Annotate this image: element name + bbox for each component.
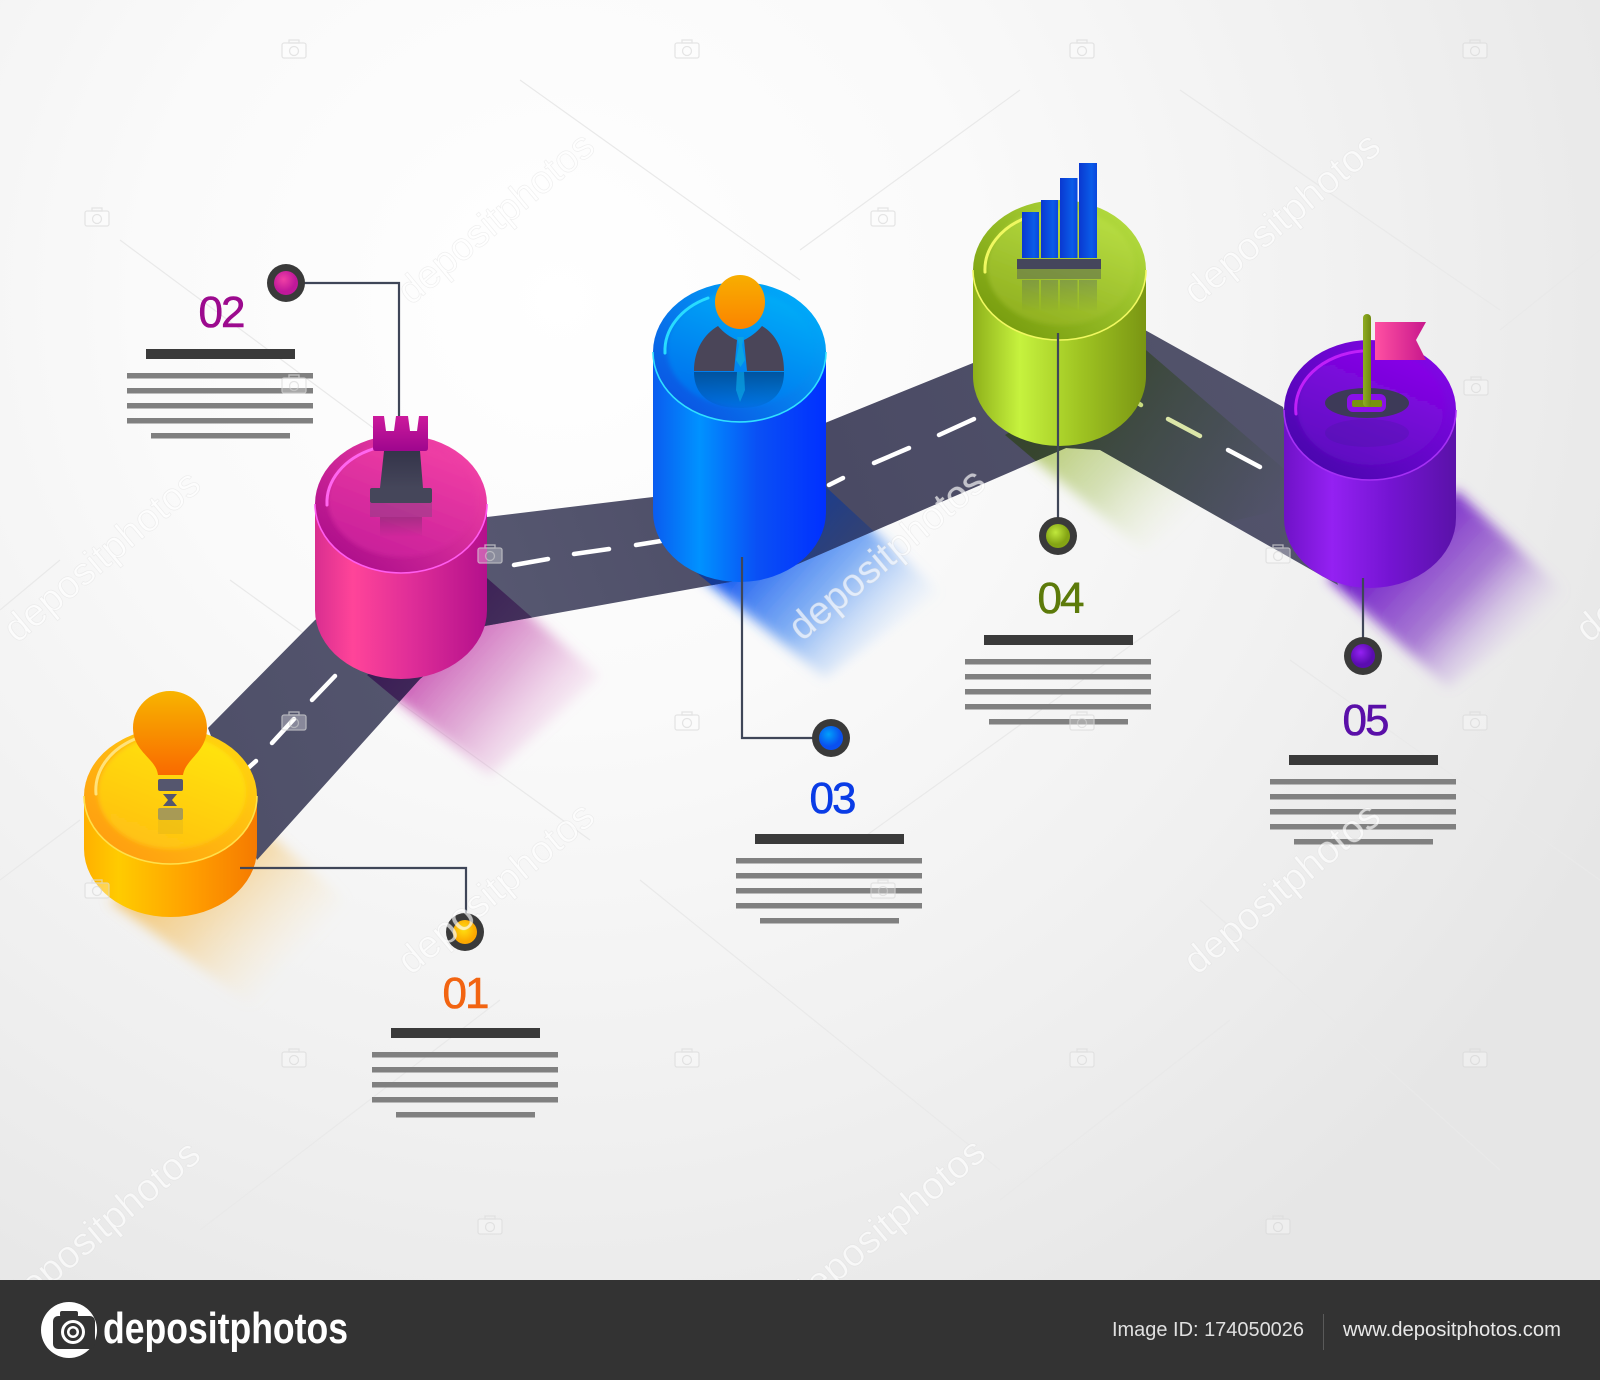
marker dot 02 — [267, 264, 305, 302]
footer bar — [0, 1280, 1600, 1380]
stock watermark: depositphotos — [0, 1132, 209, 1321]
colored floor shadows — [110, 350, 1572, 1014]
cylinder 1: yellow with light bulb — [84, 691, 257, 917]
icon: flag on target — [1325, 314, 1426, 447]
stock watermark: depositphotos — [389, 124, 603, 313]
marker dot 05 — [1344, 637, 1382, 675]
number 02: 02 — [199, 288, 244, 337]
step 05 callout — [1270, 578, 1456, 844]
marker dot 04 — [1039, 517, 1077, 555]
number 04: 04 — [1038, 574, 1084, 623]
connector line 01 — [240, 868, 466, 932]
marker dot 01 — [446, 913, 484, 951]
step 03 callout — [736, 557, 922, 924]
stock watermark: depositphotos — [389, 794, 603, 983]
icon: bar chart — [1017, 163, 1101, 312]
cylinder 2: magenta with chess rook — [315, 416, 487, 679]
cylinder 5: purple with target flag — [1284, 314, 1456, 588]
shadows cast on road — [367, 350, 1270, 702]
icon: business person — [694, 275, 784, 408]
stock watermark: depositphotos — [780, 1130, 994, 1319]
step 02 callout — [127, 264, 399, 438]
connector line 02 — [286, 283, 399, 416]
text placeholder 02 — [127, 349, 313, 438]
text placeholder 01 — [372, 1028, 558, 1118]
number 01: 01 — [443, 969, 488, 1018]
connector line 03 — [742, 557, 831, 738]
road center dashes — [246, 403, 1260, 770]
icon: chess rook — [370, 416, 432, 537]
marker dot 03 — [812, 719, 850, 757]
icon: light bulb — [133, 691, 207, 834]
step 04 callout — [965, 333, 1151, 724]
logo wordmark: depositphotos — [103, 1304, 348, 1353]
step 01 callout — [240, 868, 558, 1118]
stock watermark: depositphotos — [1175, 124, 1389, 313]
connector line 04 — [1057, 333, 1059, 537]
icon: camera logo — [41, 1302, 97, 1358]
cylinder 4: green with bar chart — [973, 163, 1146, 446]
number 03: 03 — [810, 774, 855, 823]
number 05: 05 — [1343, 696, 1388, 745]
cylinder 3: blue with business person — [653, 275, 826, 582]
image id: Image ID: 174050026 — [1112, 1319, 1304, 1341]
connector line 05 — [1362, 578, 1364, 657]
stock watermark: depositphotos — [780, 460, 994, 649]
text placeholder 04 — [965, 635, 1151, 724]
website url: www.depositphotos.com — [1342, 1319, 1561, 1341]
text placeholder 05 — [1270, 755, 1456, 844]
stock watermark: depositphotos — [1175, 794, 1389, 983]
stock watermark: depositphotos — [0, 462, 209, 651]
road — [208, 330, 1338, 860]
text placeholder 03 — [736, 834, 922, 924]
